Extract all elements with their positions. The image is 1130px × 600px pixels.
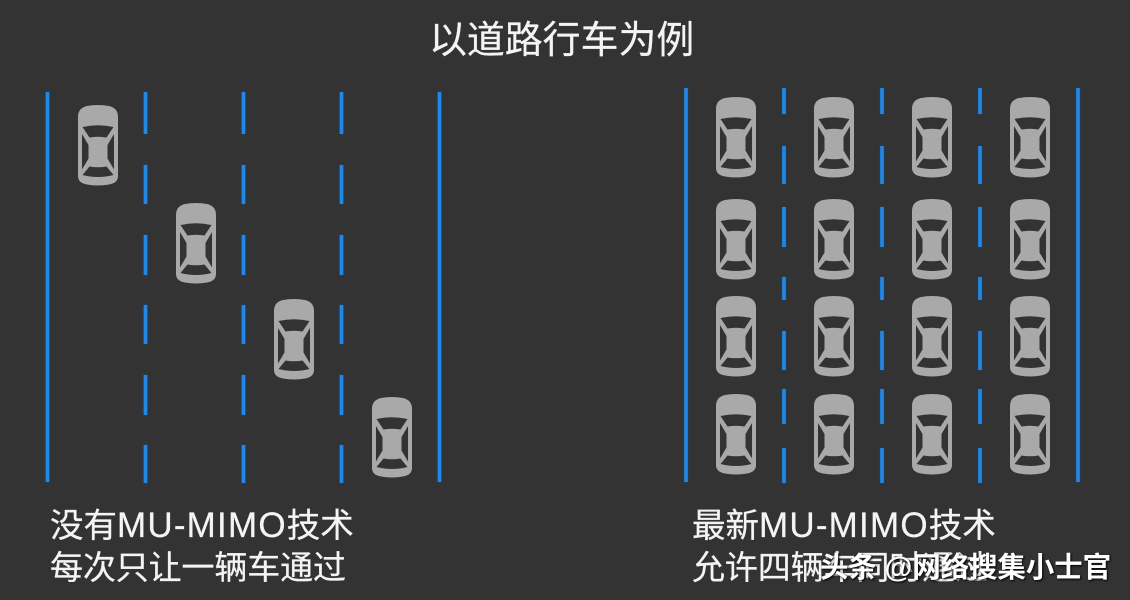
icon: car row 1 lane 4 [1010,97,1050,178]
icon: car row 2 lane 1 [716,199,756,280]
icon: car row 4 lane 2 [814,394,854,474]
caption line 2: 每次只让一辆车通过 [50,549,346,586]
lane divider 1 [782,88,786,483]
lane divider 3 [978,88,982,483]
icon: car row 1 lane 3 [912,97,952,178]
lane divider 2 [242,92,245,483]
icon: car lane 2 [176,203,216,284]
icon: car lane 3 [274,299,314,380]
icon: car row 1 lane 1 [716,97,756,178]
left road edge line [684,88,688,482]
icon: car row 2 lane 3 [912,199,952,280]
icon: car row 3 lane 2 [814,296,854,376]
icon: car row 4 lane 3 [912,394,952,474]
icon: car row 1 lane 2 [814,97,854,178]
icon: car lane 4 [372,397,412,478]
lane divider 1 [144,92,147,483]
panel: road without MU-MIMO [48,92,440,483]
panel: road with MU-MIMO [686,88,1078,483]
watermark: 头条 @网络搜集小士官 [820,552,1111,584]
icon: car lane 1 [78,105,118,186]
lane divider 3 [340,92,343,483]
icon: car row 2 lane 4 [1010,199,1050,280]
icon: car row 4 lane 4 [1010,394,1050,474]
icon: car row 4 lane 1 [716,394,756,474]
caption line 2: 允许四辆车同时通过 [692,549,988,586]
caption line 1: 最新MU-MIMO技术 [692,506,996,545]
icon: car row 3 lane 1 [716,296,756,376]
icon: car row 2 lane 2 [814,199,854,280]
text block: right caption [692,506,996,586]
lane divider 2 [880,88,884,483]
text block: left caption [50,506,354,586]
icon: car row 3 lane 4 [1010,296,1050,376]
caption line 1: 没有MU-MIMO技术 [50,506,354,545]
left road edge line [46,92,49,482]
right road edge line [438,92,441,482]
right road edge line [1076,88,1080,482]
icon: car row 3 lane 3 [912,296,952,376]
title: 以道路行车为例 [429,20,694,62]
